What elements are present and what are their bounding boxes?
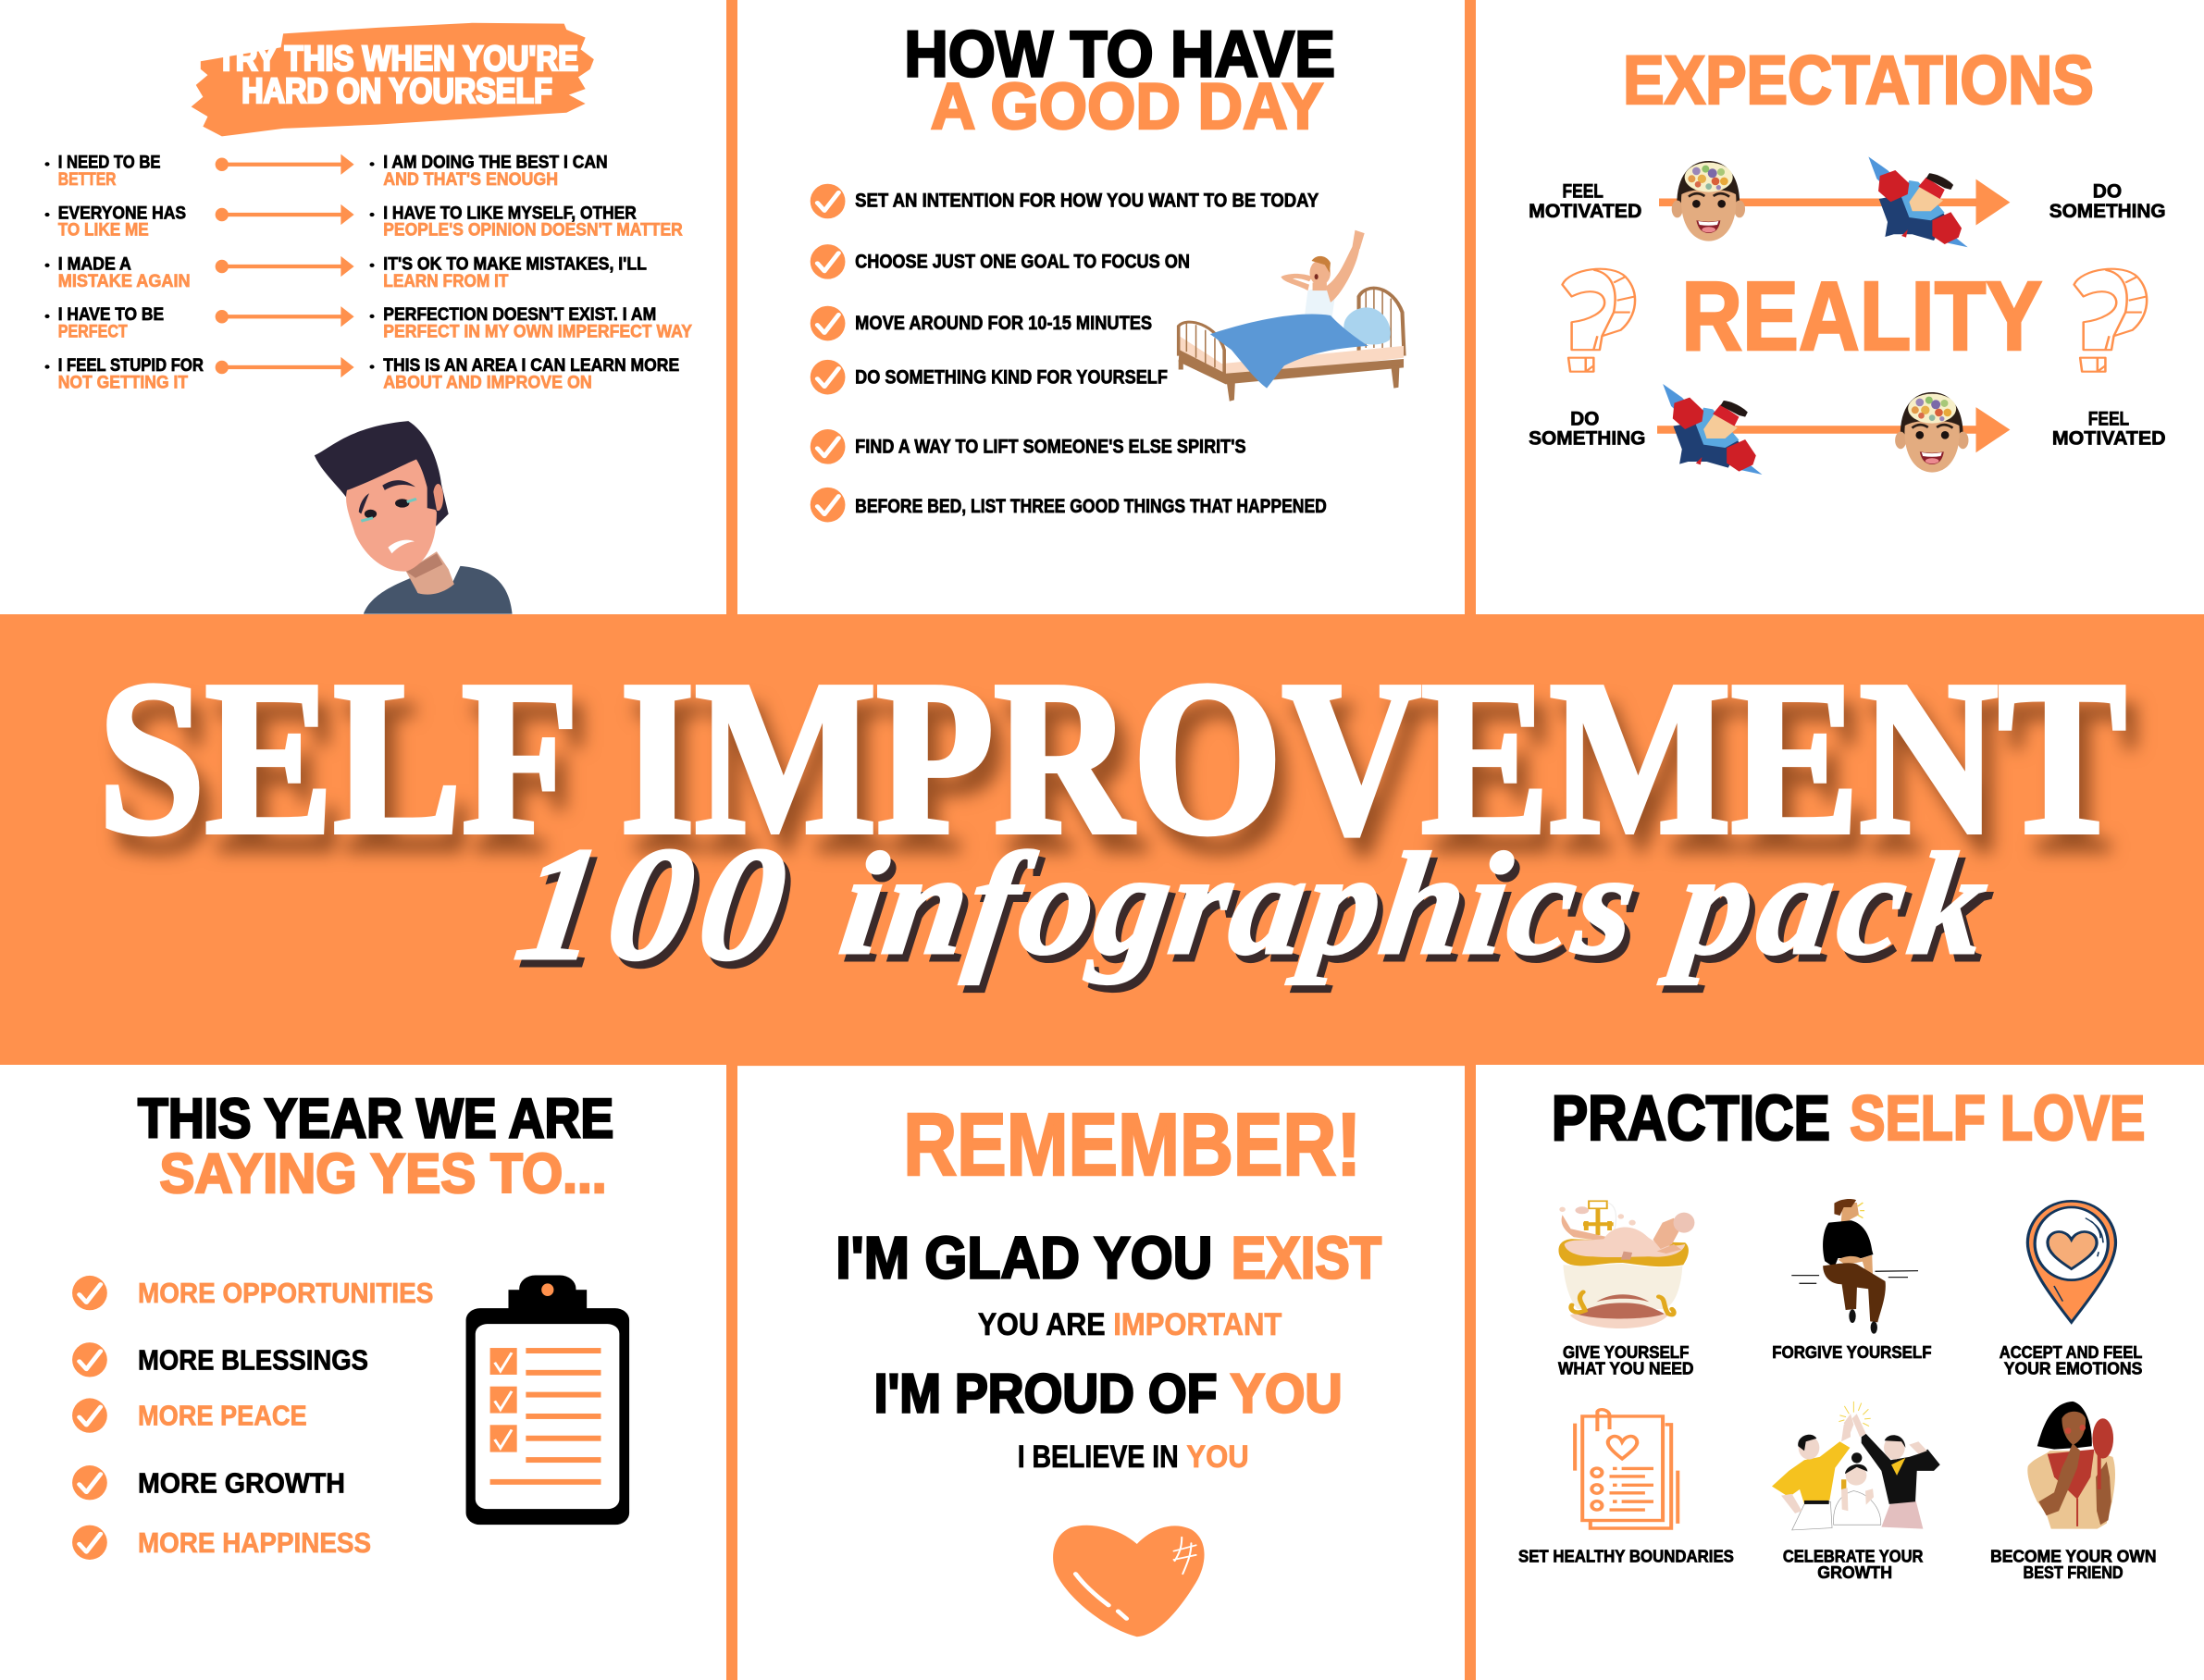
icon: heart [1053,1526,1205,1637]
expectation arrow row: MOTIVATED [1529,200,1641,222]
right column: kinder thoughts: IT'S OK TO MAKE MISTAKES, I'LL [383,253,647,274]
panel: this year we are saying yes to [72,1088,629,1560]
item: set healthy boundaries [1518,1410,1734,1566]
checklist: DO SOMETHING KIND FOR YOURSELF [855,365,1168,388]
item: set healthy boundaries: SET HEALTHY BOUNDARIES [1518,1547,1734,1566]
checklist: SET AN INTENTION FOR HOW YOU WANT TO BE TODAY [855,189,1319,211]
vertical panel divider right [1465,0,1476,1680]
item: celebrate your growth [1772,1402,1940,1582]
message: i'm glad you exist: I'M GLAD YOU [836,1225,1212,1291]
right column: kinder thoughts [369,151,692,392]
message: i'm proud of you: YOU [1231,1363,1343,1424]
checklist: MORE OPPORTUNITIES [138,1278,433,1309]
expectation arrow row [1529,156,2166,247]
heading: practice self love [1552,1082,2145,1154]
right column: kinder thoughts: LEARN FROM IT [383,270,508,290]
heading: this year we are saying yes to: THIS YEAR WE ARE [138,1088,613,1150]
item: celebrate your growth: CELEBRATE YOUR [1783,1547,1924,1566]
panel: remember [731,1064,1471,1637]
brush stroke heading background [192,23,594,136]
heading: try this when you're hard on yourself [217,39,578,110]
item: celebrate your growth: GROWTH [1817,1563,1892,1582]
left column: harsh thoughts: PERFECT [58,320,128,341]
subtitle: 100 infographics pack: pack [1657,824,1997,985]
reality arrow row: SOMETHING [1529,427,1645,449]
right column: kinder thoughts: I AM DOING THE BEST I CAN [383,151,608,172]
heading: this year we are saying yes to [138,1088,613,1204]
panel: expectations vs reality [1529,43,2166,475]
left column: harsh thoughts [44,151,204,392]
right column: kinder thoughts: AND THAT'S ENOUGH [383,168,558,190]
reality arrow row [1529,384,2166,475]
top border of panel [731,1064,1471,1066]
vertical panel divider left [726,0,737,1680]
icon: clipboard [466,1275,629,1525]
message: i'm glad you exist: EXIST [1232,1225,1381,1291]
message: you are important [978,1307,1282,1342]
checklist [811,184,1327,522]
left column: harsh thoughts: TO LIKE ME [58,219,149,240]
right column: kinder thoughts: I HAVE TO LIKE MYSELF, OTHER [383,202,637,223]
heading: reality with question marks: REALITY [1681,261,2042,371]
arrows between columns [216,154,354,377]
item: give yourself what you need: GIVE YOURSELF [1563,1343,1689,1363]
left column: harsh thoughts: I FEEL STUPID FOR [58,354,204,375]
checklist: MORE PEACE [138,1401,307,1432]
heading: remember: REMEMBER! [903,1095,1361,1194]
left column: harsh thoughts: MISTAKE AGAIN [58,270,191,290]
heading: try this when you're hard on yourself: HARD ON YOURSELF [241,72,552,110]
left column: harsh thoughts: I NEED TO BE [58,151,160,172]
expectation arrow row: DO [2093,179,2122,202]
right column: kinder thoughts: THIS IS AN AREA I CAN LEARN MORE [383,354,679,375]
message: i believe in you: YOU [1186,1439,1249,1474]
right column: kinder thoughts: PERFECTION DOESN'T EXIST. I AM [383,303,656,325]
banner: orange title band [0,614,2204,1065]
item: accept and feel your emotions: ACCEPT AND FEEL [2000,1343,2142,1363]
message: i believe in you: I BELIEVE IN [1018,1439,1179,1474]
left column: harsh thoughts: I HAVE TO BE [58,303,164,325]
subtitle: 100 infographics pack [507,814,1997,994]
heading: try this when you're hard on yourself: TRY THIS WHEN YOU'RE [217,39,578,78]
checklist: FIND A WAY TO LIFT SOMEONE'S ELSE SPIRIT'S [855,435,1246,457]
right column: kinder thoughts: PERFECT IN MY OWN IMPERFECT WAY [383,320,692,341]
checklist: MORE HAPPINESS [138,1527,371,1559]
heading: practice self love: PRACTICE [1552,1082,1830,1154]
heading: how to have a good day: HOW TO HAVE [904,19,1335,91]
panel: try this when you're hard on yourself [44,23,692,614]
checklist: MORE BLESSINGS [138,1344,368,1377]
heading: how to have a good day: A GOOD DAY [931,70,1323,142]
subtitle: 100 infographics pack: 100 [507,814,796,994]
checklist [72,1276,433,1560]
heading: this year we are saying yes to: SAYING YES TO... [159,1143,607,1204]
subtitle: 100 infographics pack: infographics [832,824,1646,985]
panel: how to have a good day [811,19,1405,522]
checklist: CHOOSE JUST ONE GOAL TO FOCUS ON [855,250,1190,272]
left column: harsh thoughts: NOT GETTING IT [58,371,188,392]
left column: harsh thoughts: I MADE A [58,253,131,274]
item: accept and feel your emotions: YOUR EMOTIONS [2004,1359,2142,1378]
reality arrow row: FEEL [2088,407,2129,429]
left column: harsh thoughts: EVERYONE HAS [58,202,186,223]
item: forgive yourself [1772,1199,1932,1363]
item: give yourself what you need [1558,1201,1694,1378]
item: accept and feel your emotions [2000,1201,2142,1378]
item: become your own best friend: BEST FRIEND [2024,1563,2124,1582]
message: you are important: YOU ARE [978,1307,1106,1342]
checklist: MOVE AROUND FOR 10-15 MINUTES [855,312,1152,333]
left column: harsh thoughts: BETTER [58,168,117,190]
item: give yourself what you need: WHAT YOU NEED [1558,1359,1693,1378]
illustration: man waking up in bed [1179,230,1405,401]
reality arrow row: DO [1570,407,1599,429]
illustration: sad man [315,421,513,614]
expectation arrow row: SOMETHING [2049,200,2166,222]
reality arrow row: MOTIVATED [2052,427,2166,449]
checklist: BEFORE BED, LIST THREE GOOD THINGS THAT HAPPENED [855,495,1327,516]
right column: kinder thoughts: ABOUT AND IMPROVE ON [383,371,592,392]
item: become your own best friend [1990,1402,2156,1582]
item: become your own best friend: BECOME YOUR OWN [1990,1547,2156,1566]
right column: kinder thoughts: PEOPLE'S OPINION DOESN'T MATTER [383,219,683,240]
panel: practice self love [1518,1082,2156,1582]
expectation arrow row: FEEL [1562,179,1603,202]
item: forgive yourself: FORGIVE YOURSELF [1772,1343,1932,1363]
checklist: MORE GROWTH [138,1467,345,1500]
message: i'm proud of you: I'M PROUD OF [874,1363,1218,1424]
heading: how to have a good day [904,19,1335,142]
message: you are important: IMPORTANT [1113,1307,1282,1342]
